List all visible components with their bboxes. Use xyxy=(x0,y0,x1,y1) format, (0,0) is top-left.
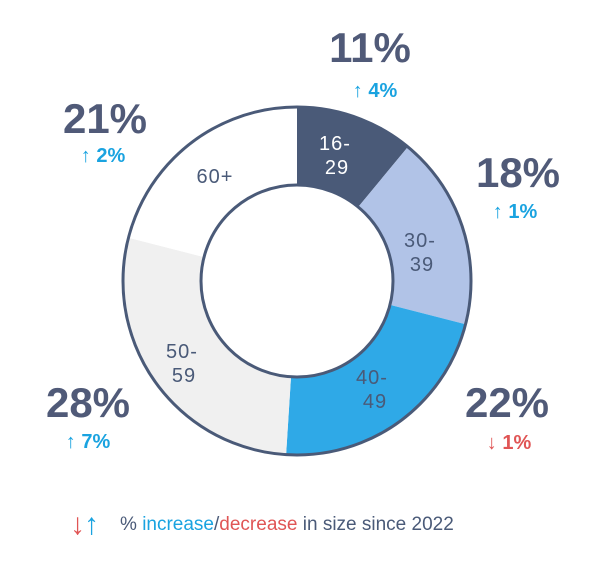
legend xyxy=(70,508,454,541)
label 28%: ↑ 7% xyxy=(66,431,110,453)
segment: 50-59 xyxy=(123,238,291,455)
label 21%: ↑ 2% xyxy=(81,145,125,167)
segment labels: 39 xyxy=(410,254,434,276)
icon: arrows: ↓ xyxy=(70,508,85,541)
segment labels: 60+ xyxy=(197,166,233,188)
segment: 60+ xyxy=(128,107,297,257)
segment labels: 40- xyxy=(356,367,388,389)
donut chart xyxy=(123,107,471,455)
label 28%: 28% xyxy=(46,379,130,426)
segment labels: 59 xyxy=(172,365,196,387)
segment labels: 29 xyxy=(325,157,349,179)
segment labels: 30- xyxy=(404,230,436,252)
label 18%: ↑ 1% xyxy=(493,201,537,223)
label 21%: 21% xyxy=(63,95,147,142)
icon: arrows xyxy=(70,508,99,541)
segment: 40-49 xyxy=(286,305,466,455)
label 22%: ↓ 1% xyxy=(487,432,531,454)
label 11%: ↑ 4% xyxy=(353,80,397,102)
segment labels: 16- xyxy=(319,133,351,155)
label 22% xyxy=(465,379,549,454)
label 18%: 18% xyxy=(476,149,560,196)
label 21% xyxy=(63,95,147,167)
segment labels: 49 xyxy=(363,391,387,413)
segment labels xyxy=(166,133,436,413)
label 11%: 11% xyxy=(329,24,411,71)
label 11% xyxy=(329,24,411,102)
icon: arrows: ↑ xyxy=(84,508,99,541)
legend: % increase/decrease in size since 2022 xyxy=(120,514,454,535)
label 28% xyxy=(46,379,130,453)
segment: 16-29 xyxy=(297,107,408,207)
segment labels: 50- xyxy=(166,341,198,363)
percentage labels xyxy=(46,24,560,454)
segment: 30-39 xyxy=(358,147,471,324)
label 18% xyxy=(476,149,560,223)
label 22%: 22% xyxy=(465,379,549,426)
